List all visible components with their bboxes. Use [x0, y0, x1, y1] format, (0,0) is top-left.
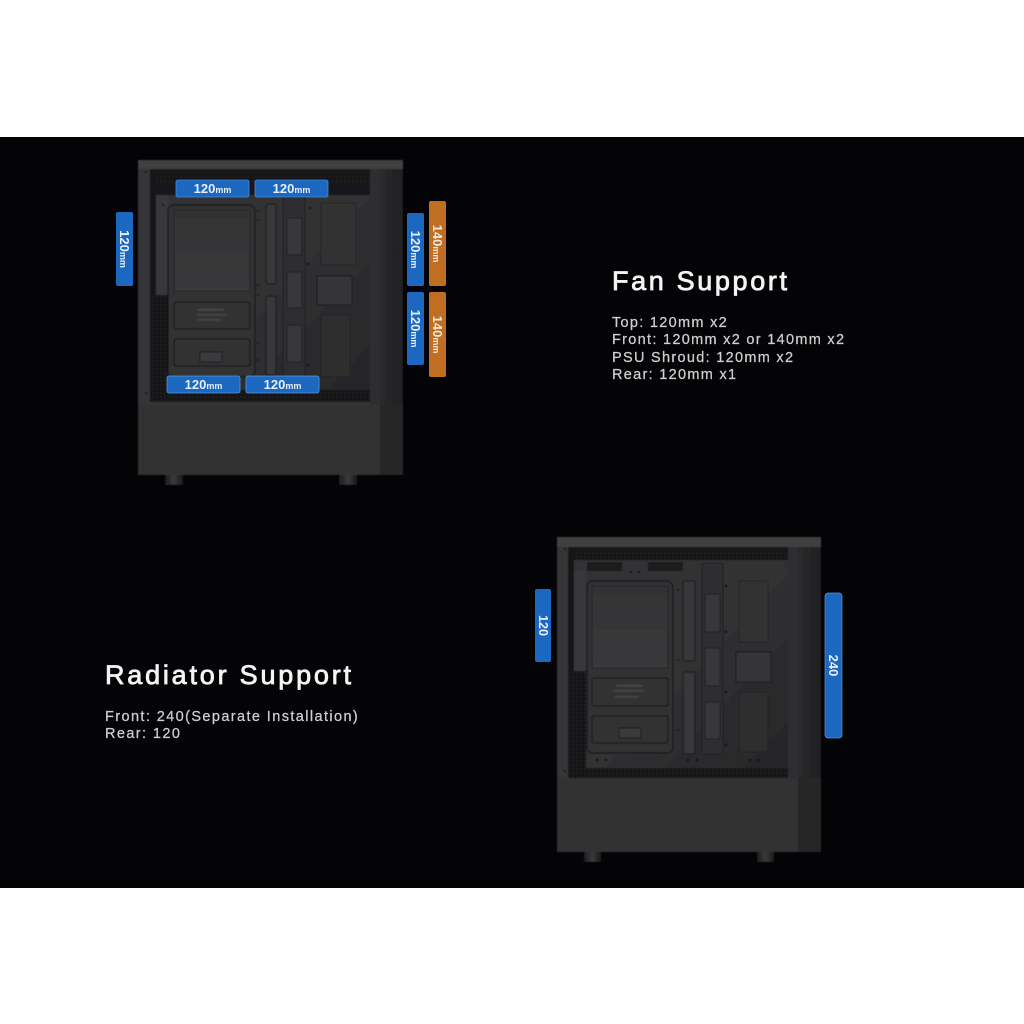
text block: fan support details: Front: 120mm x2 or 140mm x2: [612, 332, 845, 348]
label: top fan 120mm left: 120mm: [194, 181, 231, 196]
text block: fan support details: PSU Shroud: 120mm x2: [612, 350, 794, 366]
label: top fan 120mm right: 120mm: [273, 181, 310, 196]
fan support case illustration: [138, 160, 403, 485]
label: front fan 140mm upper: [429, 201, 446, 286]
heading: radiator support: Radiator Support: [105, 660, 351, 690]
heading: fan support: Fan Support: [612, 266, 787, 296]
text block: fan support details: Top: 120mm x2: [612, 315, 728, 331]
radiator support case illustration: [557, 537, 821, 862]
label: front fan 120mm upper: [407, 213, 424, 286]
black panel background: [0, 137, 1024, 888]
label: top fan 120mm left: [176, 180, 249, 197]
label: shroud fan 120mm left: [167, 376, 240, 393]
label: shroud fan 120mm right: [246, 376, 319, 393]
label: shroud fan 120mm right: 120mm: [264, 377, 301, 392]
label: front fan 120mm lower: [407, 292, 424, 365]
label: front radiator 240: [825, 593, 842, 738]
label: front fan 140mm lower: 140 mm: [430, 316, 445, 353]
text block: radiator support details: Front: 240(Separate Installation): [105, 709, 359, 725]
label: top fan 120mm right: [255, 180, 328, 197]
label: front fan 140mm upper: 140 mm: [430, 225, 445, 262]
text block: fan support details: Rear: 120mm x1: [612, 367, 737, 383]
label: rear fan 120mm: [116, 212, 133, 286]
text block: fan support details: [612, 315, 845, 383]
label: front fan 120mm lower: 120 mm: [408, 310, 423, 347]
label group: fan support sizes: [116, 180, 446, 393]
text block: radiator support details: Rear: 120: [105, 726, 181, 742]
label: rear radiator 120: [535, 589, 551, 662]
label: shroud fan 120mm left: 120mm: [185, 377, 222, 392]
text block: radiator support details: [105, 709, 359, 742]
label: front fan 120mm upper: 120 mm: [408, 231, 423, 268]
label: front radiator 240: 240: [826, 655, 841, 676]
label: front fan 140mm lower: [429, 292, 446, 377]
label: rear radiator 120: 120: [536, 615, 550, 636]
label: rear fan 120mm: 120 mm: [117, 230, 132, 268]
